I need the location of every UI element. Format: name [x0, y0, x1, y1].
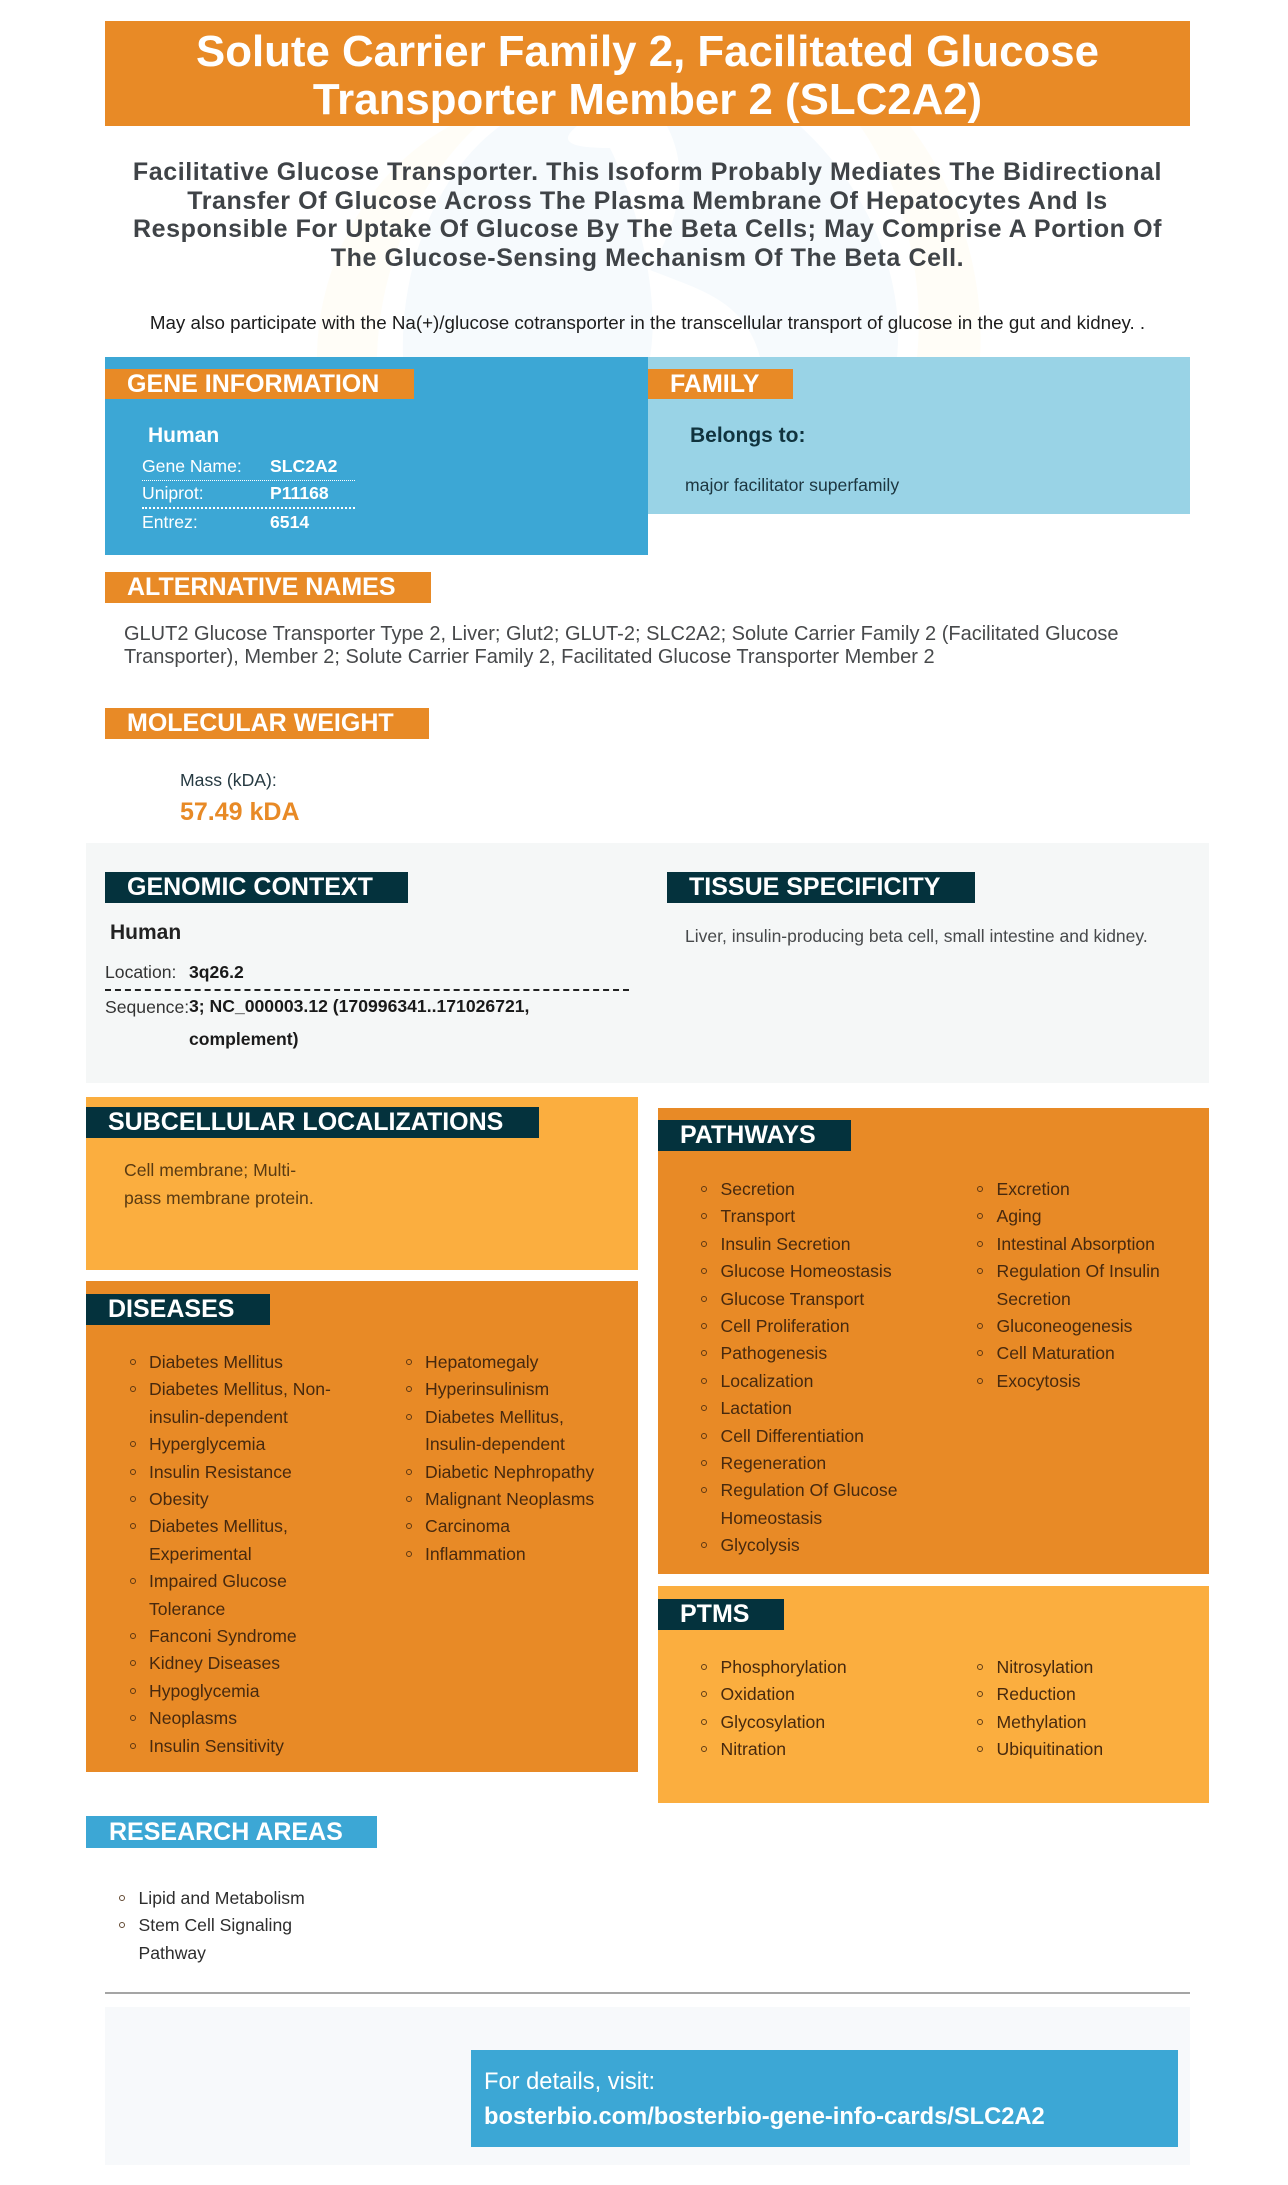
- pathways list column 1: Lactation: [720, 1398, 792, 1418]
- title banner: Transporter Member 2 (SLC2A2): [313, 75, 982, 124]
- panel: subcellular localizations: [86, 1097, 638, 1270]
- heading: pathways: PATHWAYS: [680, 1121, 816, 1149]
- mass value: 57.49 kDA: [180, 798, 300, 826]
- PTMs list column 1: Nitration: [720, 1739, 786, 1759]
- species label: Human: [148, 424, 219, 447]
- heading: gene information: GENE INFORMATION: [127, 370, 379, 398]
- heading: family: [648, 369, 793, 399]
- location row: Location:: [105, 962, 176, 982]
- gene table: [142, 456, 355, 532]
- heading: pathways: [658, 1120, 851, 1151]
- gene table: Entrez:: [142, 512, 198, 532]
- pathways list column 2: [977, 1179, 1160, 1391]
- title banner: Solute Carrier Family 2, Facilitated Glucose: [196, 27, 1099, 76]
- gene table: Gene Name:: [142, 456, 242, 476]
- pathways list column 1: Glucose Homeostasis: [720, 1261, 892, 1281]
- diseases list column 1: Neoplasms: [149, 1708, 237, 1728]
- research areas list: [119, 1888, 305, 1963]
- belongs to label: Belongs to:: [690, 424, 806, 447]
- diseases list column 1: insulin-dependent: [149, 1407, 288, 1427]
- panel: genomic context and tissue specificity: 3q26.2: [189, 962, 244, 982]
- gene table: SLC2A2: [270, 456, 337, 476]
- PTMs list column 2: Nitrosylation: [996, 1657, 1093, 1677]
- tissue text: Liver, insulin-producing beta cell, small intestine and kidney.: [685, 926, 1148, 946]
- pathways list column 1: Homeostasis: [720, 1508, 822, 1528]
- alternative names text: GLUT2 Glucose Transporter Type 2, Liver; Glut2; GLUT-2; SLC2A2; Solute Carrier Family 2 (Facilitated Glucose: [124, 623, 1118, 645]
- pathways list column 1: Glycolysis: [720, 1535, 800, 1555]
- pathways list column 2: Intestinal Absorption: [996, 1234, 1155, 1254]
- callout: details link: bosterbio.com/bosterbio-gene-info-cards/SLC2A2: [484, 2104, 1045, 2130]
- localization text: Cell membrane; Multi-: [124, 1160, 296, 1180]
- localization text: pass membrane protein.: [124, 1188, 314, 1208]
- subtitle: The Glucose-Sensing Mechanism Of The Beta Cell.: [331, 244, 964, 272]
- diseases list column 1: Obesity: [149, 1489, 209, 1509]
- research areas list: Lipid and Metabolism: [138, 1888, 305, 1908]
- species label: Human: [110, 921, 181, 944]
- diseases list column 2: Diabetes Mellitus,: [425, 1407, 564, 1427]
- panel: PTMs: [658, 1586, 1209, 1803]
- research areas list: Stem Cell Signaling: [138, 1915, 292, 1935]
- sequence row: Sequence:: [105, 997, 189, 1017]
- heading: PTMs: PTMS: [680, 1600, 749, 1628]
- pathways list column 2: Secretion: [996, 1289, 1071, 1309]
- pathways list column 1: Cell Differentiation: [720, 1426, 864, 1446]
- subtitle: Transfer Of Glucose Across The Plasma Membrane Of Hepatocytes And Is: [187, 187, 1108, 215]
- diseases list column 1: Fanconi Syndrome: [149, 1626, 297, 1646]
- PTMs list column 1: Oxidation: [720, 1684, 795, 1704]
- diseases list column 1: Tolerance: [149, 1599, 225, 1619]
- panel: genomic context and tissue specificity: 3; NC_000003.12 (170996341..171026721,: [189, 996, 529, 1016]
- callout: details link: [471, 2050, 1178, 2147]
- alternative names text: Transporter), Member 2; Solute Carrier Family 2, Facilitated Glucose Transporter Member 2: [124, 646, 935, 668]
- diseases list column 2: Diabetic Nephropathy: [425, 1462, 594, 1482]
- callout: details link: For details, visit:: [484, 2069, 655, 2095]
- family value: major facilitator superfamily: [685, 475, 899, 495]
- mass label: Mass (kDA):: [180, 770, 277, 790]
- pathways list column 1: Pathogenesis: [720, 1343, 827, 1363]
- pathways list column 1: [701, 1179, 898, 1555]
- panel: gene information: [105, 357, 648, 555]
- pathways list column 1: Regeneration: [720, 1453, 826, 1473]
- title banner: [105, 21, 1190, 126]
- diseases list column 2: Inflammation: [425, 1544, 526, 1564]
- PTMs list column 2: [977, 1657, 1103, 1759]
- diseases list column 1: [130, 1352, 331, 1756]
- footer panel: [105, 2007, 1190, 2165]
- pathways list column 1: Regulation Of Glucose: [720, 1480, 898, 1500]
- pathways list column 2: Exocytosis: [996, 1371, 1081, 1391]
- heading: diseases: [86, 1294, 270, 1325]
- PTMs list column 2: Reduction: [996, 1684, 1076, 1704]
- PTMs list column 2: Ubiquitination: [996, 1739, 1103, 1759]
- heading: diseases: DISEASES: [108, 1295, 234, 1323]
- panel: genomic context and tissue specificity: complement): [189, 1029, 298, 1049]
- heading: genomic context: GENOMIC CONTEXT: [127, 873, 373, 901]
- diseases list column 2: Carcinoma: [425, 1516, 510, 1536]
- pathways list column 2: Cell Maturation: [996, 1343, 1115, 1363]
- intro sentence: May also participate with the Na(+)/glucose cotransporter in the transcellular transport of glucose in the gut and kidney. .: [150, 312, 1145, 333]
- gene table: Uniprot:: [142, 483, 204, 503]
- diseases list column 2: [406, 1352, 594, 1564]
- diseases list column 1: Experimental: [149, 1544, 252, 1564]
- pathways list column 2: Gluconeogenesis: [996, 1316, 1132, 1336]
- pathways list column 1: Glucose Transport: [720, 1289, 864, 1309]
- diseases list column 1: Insulin Resistance: [149, 1462, 292, 1482]
- pathways list column 1: Transport: [720, 1206, 795, 1226]
- heading: family: FAMILY: [670, 370, 759, 398]
- heading: alternative names: ALTERNATIVE NAMES: [127, 573, 396, 601]
- pathways list column 2: Aging: [996, 1206, 1042, 1226]
- heading: subcellular localizations: SUBCELLULAR LOCALIZATIONS: [108, 1108, 503, 1136]
- diseases list column 1: Diabetes Mellitus: [149, 1352, 283, 1372]
- PTMs list column 1: Phosphorylation: [720, 1657, 847, 1677]
- gene table: 6514: [270, 512, 309, 532]
- heading: molecular weight: MOLECULAR WEIGHT: [127, 709, 394, 737]
- subtitle: Responsible For Uptake Of Glucose By The Beta Cells; May Comprise A Portion Of: [133, 215, 1162, 243]
- PTMs list column 1: Glycosylation: [720, 1712, 825, 1732]
- pathways list column 2: Excretion: [996, 1179, 1070, 1199]
- PTMs list column 2: Methylation: [996, 1712, 1086, 1732]
- heading: PTMs: [658, 1599, 784, 1630]
- pathways list column 2: Regulation Of Insulin: [996, 1261, 1160, 1281]
- gene table: P11168: [270, 483, 329, 503]
- panel: genomic context and tissue specificity: [86, 843, 1209, 1083]
- diseases list column 2: Insulin-dependent: [425, 1434, 565, 1454]
- alternative names text: [124, 623, 1118, 668]
- panel: family: [648, 357, 1190, 514]
- diseases list column 1: Diabetes Mellitus, Non-: [149, 1379, 331, 1399]
- diseases list column 1: Hyperglycemia: [149, 1434, 265, 1454]
- heading: tissue specificity: TISSUE SPECIFICITY: [689, 873, 940, 901]
- panel: pathways: [658, 1108, 1209, 1574]
- diseases list column 1: Hypoglycemia: [149, 1681, 260, 1701]
- diseases list column 2: Malignant Neoplasms: [425, 1489, 594, 1509]
- subtitle: Facilitative Glucose Transporter. This Isoform Probably Mediates The Bidirectional: [133, 158, 1162, 186]
- research areas list: Pathway: [138, 1943, 206, 1963]
- diseases list column 1: Kidney Diseases: [149, 1653, 280, 1673]
- PTMs list column 1: [701, 1657, 847, 1759]
- diseases list column 2: Hepatomegaly: [425, 1352, 538, 1372]
- pathways list column 1: Localization: [720, 1371, 813, 1391]
- panel: diseases: [86, 1281, 638, 1772]
- pathways list column 1: Cell Proliferation: [720, 1316, 850, 1336]
- diseases list column 1: Impaired Glucose: [149, 1571, 287, 1591]
- watermark logo: [403, 126, 898, 357]
- heading: research areas: RESEARCH AREAS: [109, 1818, 343, 1846]
- localization text: [124, 1160, 314, 1208]
- diseases list column 2: Hyperinsulinism: [425, 1379, 549, 1399]
- diseases list column 1: Insulin Sensitivity: [149, 1736, 284, 1756]
- subtitle: [133, 158, 1162, 272]
- pathways list column 1: Secretion: [720, 1179, 795, 1199]
- pathways list column 1: Insulin Secretion: [720, 1234, 851, 1254]
- diseases list column 1: Diabetes Mellitus,: [149, 1516, 288, 1536]
